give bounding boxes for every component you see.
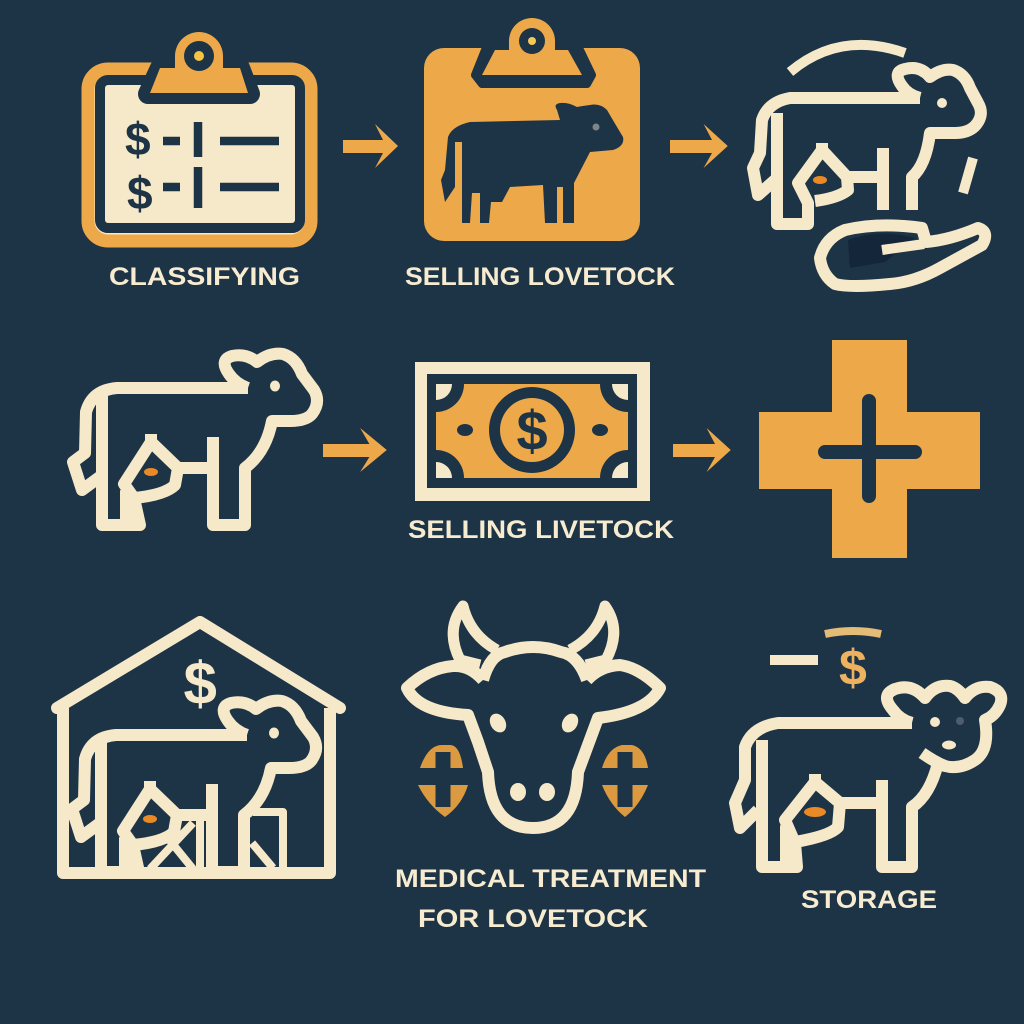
icon: cow with price bbox=[735, 631, 1001, 872]
label: classifying: CLASSIFYING bbox=[109, 263, 300, 291]
arrow 4 bbox=[673, 428, 731, 472]
icon: barn with cow: $ bbox=[184, 650, 217, 717]
label: medical treatment: MEDICAL TREATMENT bbox=[395, 865, 706, 893]
icon: price list clipboard bbox=[88, 32, 311, 241]
icon: cow with hand bbox=[753, 45, 985, 286]
icon: barn with cow bbox=[57, 622, 340, 877]
tick bbox=[963, 158, 973, 193]
hand outline bbox=[820, 225, 985, 286]
arrow 2 bbox=[670, 124, 728, 168]
label: selling livestock: SELLING LOVETOCK bbox=[405, 263, 675, 291]
icon: medical cross bbox=[759, 340, 980, 558]
icon: banknote bbox=[415, 362, 650, 501]
arrow 3 bbox=[323, 428, 387, 472]
arrow 1 bbox=[343, 124, 398, 168]
icon: price list clipboard: $ bbox=[125, 113, 151, 165]
icon: cow with price: $ bbox=[839, 640, 867, 696]
icon: banknote: $ bbox=[516, 399, 548, 462]
label: storage: STORAGE bbox=[801, 886, 937, 914]
icon: cow bbox=[73, 354, 317, 530]
icon: cow head with crosses bbox=[407, 606, 660, 828]
label: selling livestock 2: SELLING LIVETOCK bbox=[408, 516, 674, 544]
hand bbox=[848, 233, 915, 268]
dashes bbox=[770, 655, 818, 665]
icon: clipboard with cow bbox=[424, 18, 640, 241]
icon: price list clipboard: $ bbox=[127, 167, 153, 219]
label: for livestock: FOR LOVETOCK bbox=[418, 905, 648, 933]
arc bbox=[790, 45, 905, 72]
